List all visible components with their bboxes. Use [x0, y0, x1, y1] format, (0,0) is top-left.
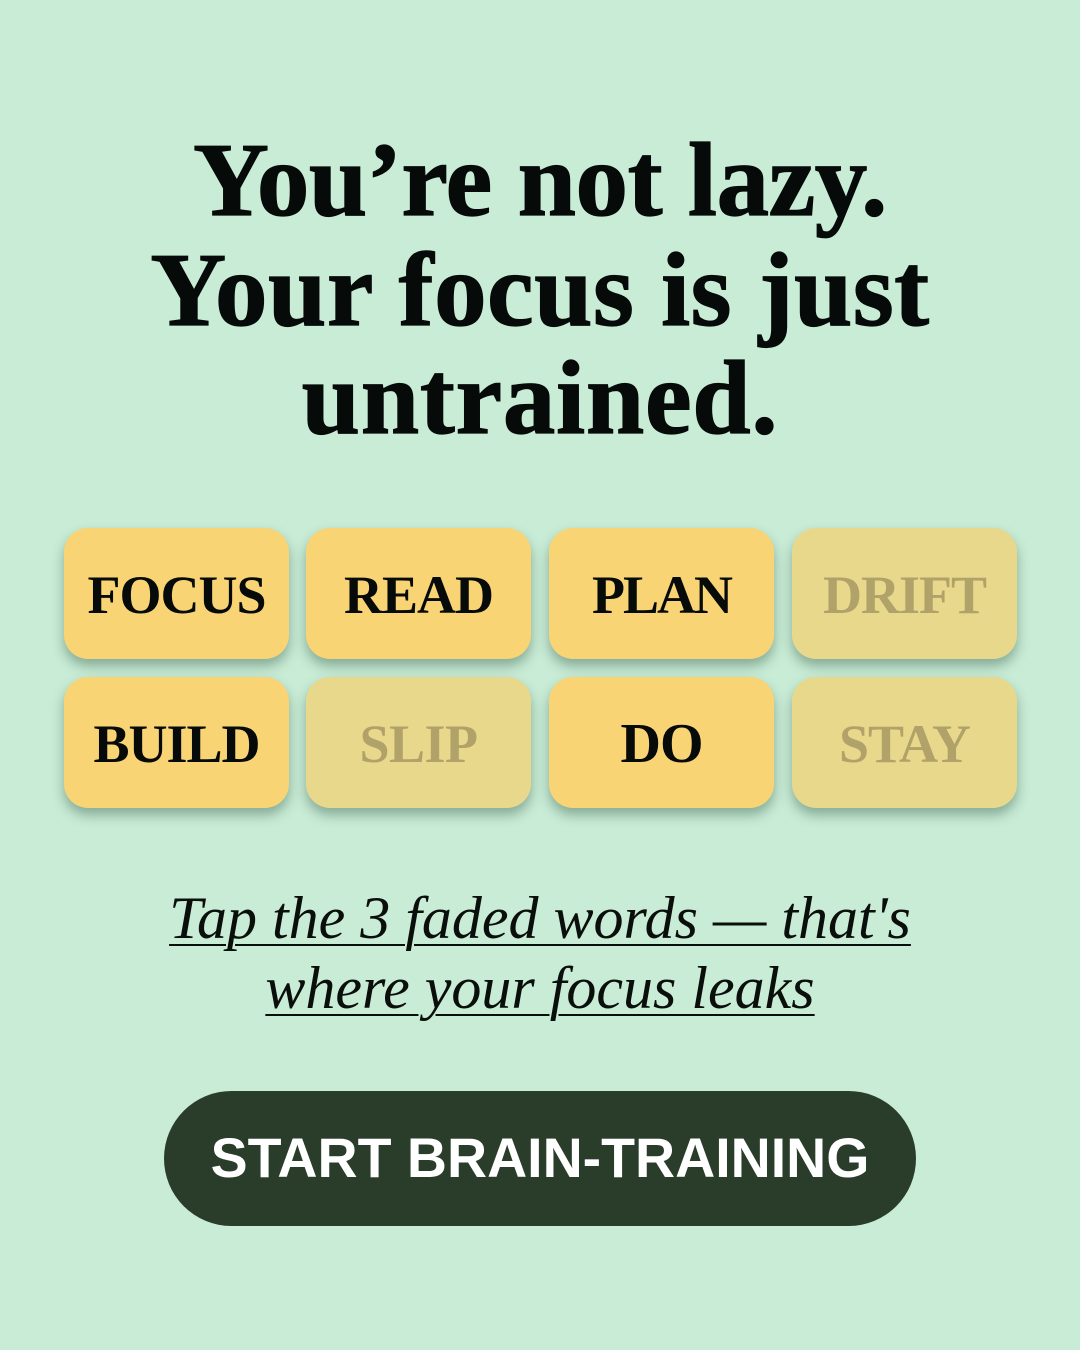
- tile: DO: [549, 677, 774, 808]
- tile: READ: [306, 528, 531, 659]
- tile: DRIFT faded: [792, 528, 1017, 659]
- title: Your focus is just: [150, 231, 930, 348]
- tile: SLIP faded: [306, 677, 531, 808]
- tile: FOCUS: [64, 528, 289, 659]
- instruction text: [169, 885, 911, 1021]
- tile: BUILD: [64, 677, 289, 808]
- button: START BRAIN-TRAINING: [211, 1127, 869, 1189]
- tile: PLAN: [549, 528, 774, 659]
- title: untrained.: [302, 339, 778, 456]
- tile: BUILD: BUILD: [93, 714, 260, 774]
- tile: DRIFT faded: DRIFT: [823, 565, 986, 625]
- tile: STAY faded: [792, 677, 1017, 808]
- tile: DO: DO: [620, 713, 702, 775]
- instruction text: where your focus leaks: [265, 955, 815, 1021]
- tile: STAY faded: STAY: [839, 714, 970, 774]
- title: [150, 121, 930, 456]
- tile: PLAN: PLAN: [592, 565, 731, 625]
- instruction text: Tap the 3 faded words — that's: [169, 885, 911, 951]
- title: You’re not lazy.: [193, 121, 887, 238]
- tile: FOCUS: FOCUS: [87, 565, 266, 625]
- tile: SLIP faded: SLIP: [359, 714, 478, 774]
- tile: READ: READ: [344, 565, 493, 625]
- button: [164, 1091, 916, 1226]
- word grid: [56, 528, 1024, 822]
